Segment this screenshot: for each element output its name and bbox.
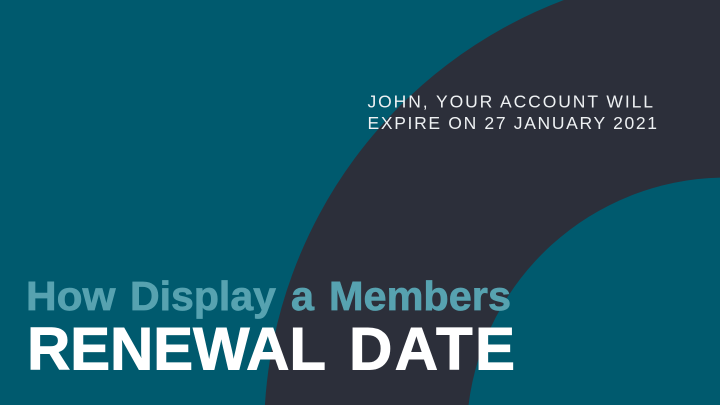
title line 1: a xyxy=(291,273,314,319)
expiry line 2: EXPIRE ON 27 JANUARY 2021 xyxy=(368,113,657,133)
dark arc band xyxy=(265,0,720,405)
expiry line 1: JOHN, YOUR ACCOUNT WILL xyxy=(368,92,653,112)
account expiry message xyxy=(368,92,657,133)
title line 2: RENEWAL xyxy=(27,316,326,382)
title line 1: Members xyxy=(329,273,511,319)
title line 1 xyxy=(26,273,511,319)
title line 1: Display xyxy=(130,273,276,319)
title line 2: DATE xyxy=(349,316,515,382)
title line 2 xyxy=(27,316,515,382)
title line 1: How xyxy=(26,273,116,319)
